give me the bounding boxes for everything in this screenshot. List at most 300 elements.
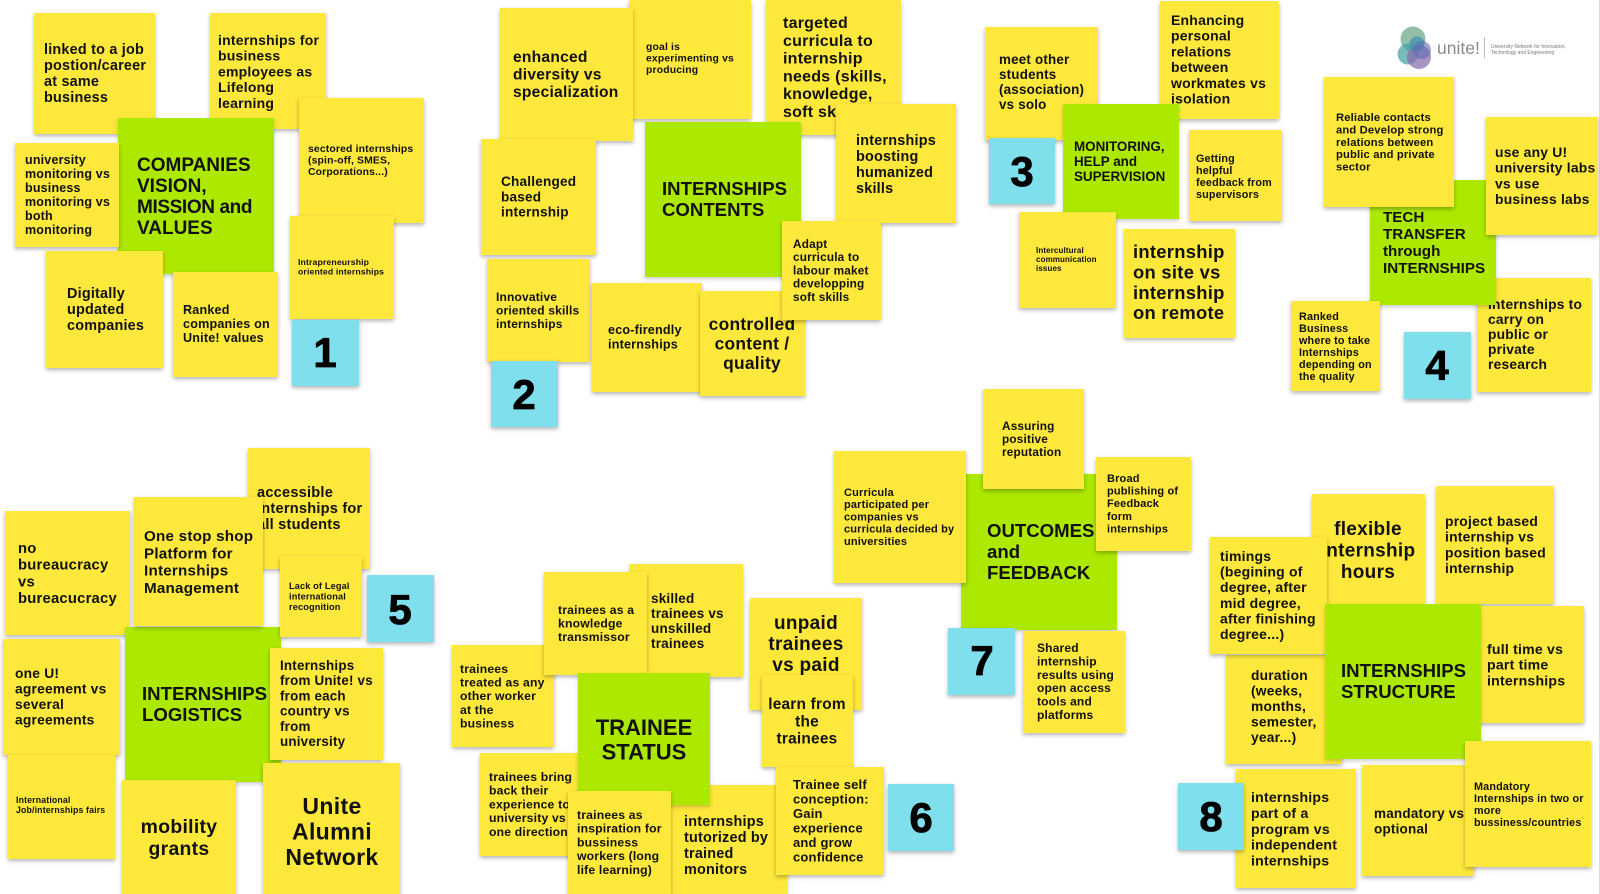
note: reliable contacts: and Develop strong xyxy=(1336,124,1443,136)
number badge 5: 5 xyxy=(388,586,412,633)
note: intercultural communication issues: issues xyxy=(1036,264,1062,273)
note: one stop shop platform: Internships xyxy=(144,563,228,580)
note: intrapreneurship oriented internships: Intrapreneurship xyxy=(298,257,369,267)
note: intercultural communication issues: Intercultural xyxy=(1036,246,1084,255)
note: trainees treated as any other worker: at the xyxy=(460,703,494,717)
note: assuring positive reputation: reputation xyxy=(1002,445,1061,459)
heading note: trainee status: TRAINEE xyxy=(596,715,692,740)
note: internships part of a program: independent xyxy=(1251,837,1337,853)
note: challenged based internship: internship xyxy=(501,205,569,220)
note: timings: degree, after xyxy=(1220,579,1307,595)
note: sectored internships xyxy=(299,98,424,223)
note: internships to carry on research: public or xyxy=(1488,327,1549,342)
note: shared internship results: results using xyxy=(1037,668,1114,682)
note: internships from unite: university xyxy=(280,734,346,749)
note: learn from the trainees: trainees xyxy=(777,731,837,748)
note: one U! agreement: one U! xyxy=(15,666,59,681)
note: challenged based internship: Challenged xyxy=(501,174,576,189)
note: enhanced diversity: diversity vs xyxy=(513,66,602,84)
number badge 8: 8 xyxy=(1199,793,1223,840)
note: international job fairs xyxy=(8,755,115,859)
logo tagline: University Network for Innovation, xyxy=(1491,44,1566,50)
note: lack of legal recognition: international xyxy=(289,592,346,602)
note: eco-firendly internships xyxy=(592,283,702,392)
heading note: companies vision, mission and values: COMPANIES xyxy=(137,155,251,176)
heading note: tech transfer through internships: through xyxy=(1383,243,1440,260)
note: one stop shop platform: One stop shop xyxy=(144,528,253,545)
note: ranked companies: companies on xyxy=(183,317,270,331)
note: enhancing personal relations: workmates vs xyxy=(1170,75,1266,91)
note: no bureaucracy: bureaucracy xyxy=(18,558,109,574)
note: timings xyxy=(1210,537,1327,654)
note: no bureaucracy xyxy=(5,511,130,635)
note: one stop shop platform: Platform for xyxy=(144,545,233,562)
note: university monitoring: both xyxy=(25,209,53,223)
note: enhanced diversity xyxy=(500,8,633,141)
note: internships part of a program xyxy=(1236,769,1356,888)
note: shared internship results: tools and xyxy=(1037,695,1092,709)
note: sectored internships: (spin-off, SMES, xyxy=(308,156,390,166)
note: use any U! university labs: business labs xyxy=(1495,191,1590,207)
note: eco-firendly internships: eco-firendly xyxy=(608,323,682,337)
heading note: tech transfer through internships: INTERNSHIPS xyxy=(1383,260,1485,277)
heading note: trainee status: STATUS xyxy=(602,740,686,764)
cluster 8: internships structure xyxy=(1178,486,1591,888)
note: internships boosting humanized skills: humanized xyxy=(856,165,933,181)
note: unite alumni network: Network xyxy=(285,844,379,870)
note: broad publishing of feedback: Feedback xyxy=(1107,498,1160,510)
heading note: internships structure: STRUCTURE xyxy=(1341,681,1456,702)
note: skilled trainees xyxy=(630,564,743,677)
heading note: companies vision, mission and values: MISSION and xyxy=(137,197,252,218)
note: targeted curricula: needs (skills, xyxy=(783,68,887,85)
note: internship on site vs remote: internship xyxy=(1133,282,1225,303)
note: adapt curricula: soft skills xyxy=(793,290,850,304)
note: accessible internships xyxy=(248,448,370,569)
note: internships from unite: country vs xyxy=(280,704,350,719)
note: trainees treated as any other worker: other worker xyxy=(460,689,536,703)
note: no bureaucracy: no xyxy=(18,541,37,557)
note: shared internship results: internship xyxy=(1037,654,1097,668)
note: internships for business employees: business xyxy=(218,48,280,64)
note: internships part of a program: part of a xyxy=(1251,805,1309,821)
note: broad publishing of feedback xyxy=(1096,457,1191,551)
note: shared internship results: Shared xyxy=(1037,641,1079,655)
note: ranked business: Business xyxy=(1299,323,1348,335)
note: mandatory vs optional xyxy=(1362,765,1474,876)
heading note: outcomes and feedback: FEEDBACK xyxy=(987,562,1091,583)
logo mark: overlapping circles xyxy=(1398,26,1431,69)
cluster 6: trainee status xyxy=(452,564,954,894)
note: intrapreneurship oriented internships: oriented internships xyxy=(298,266,384,276)
cluster 3: monitoring, help and supervision xyxy=(985,1,1282,338)
note: mandatory internships in two or more: bussiness/countries xyxy=(1474,817,1581,829)
note: internships for business employees: employees as xyxy=(218,63,312,79)
heading note: outcomes and feedback: and xyxy=(987,541,1020,562)
note: duration: (weeks, xyxy=(1251,684,1302,698)
note: meet other students: (association) xyxy=(999,82,1084,97)
note: project based internship: internship xyxy=(1445,560,1514,576)
note: sectored internships: Corporations...) xyxy=(308,167,388,178)
note: internships tutorized by trained monitors: monitors xyxy=(684,862,747,878)
cluster 1: companies vision, mission and values xyxy=(15,13,424,386)
note: university monitoring xyxy=(15,143,119,247)
note: internships from unite: from xyxy=(280,719,311,734)
note: adapt curricula: curricula to xyxy=(793,250,859,264)
note: ranked companies: Unite! values xyxy=(183,331,264,345)
note: one U! agreement: several xyxy=(15,697,64,712)
note: broad publishing of feedback: Broad xyxy=(1107,473,1140,485)
heading note: internships logistics xyxy=(125,627,281,782)
note: adapt curricula xyxy=(782,221,881,320)
note: internships to carry on research: research xyxy=(1488,357,1547,372)
note: sectored internships: sectored internships xyxy=(308,144,413,155)
note: duration: duration xyxy=(1251,668,1308,683)
note: internships tutorized by trained monitors xyxy=(668,785,787,894)
number badge 6: 6 xyxy=(909,794,933,841)
note: trainees bring back experience: experience to xyxy=(489,797,570,811)
note: trainees as inspiration xyxy=(568,791,671,894)
note: internship on site vs remote: internship xyxy=(1133,241,1225,262)
note: enhancing personal relations: isolation xyxy=(1171,90,1230,106)
note: flexible internship hours xyxy=(1312,494,1425,607)
note: flexible internship hours: hours xyxy=(1341,562,1395,583)
note: unite alumni network: Alumni xyxy=(292,818,372,844)
note: one U! agreement: agreement vs xyxy=(15,682,107,696)
note: trainees treated as any other worker: business xyxy=(460,716,514,730)
note: accessible internships: internships for xyxy=(257,501,363,517)
note: unpaid trainees vs paid: unpaid xyxy=(774,613,838,634)
note: linked to a job: business xyxy=(44,90,108,106)
note: ranked business: where to take xyxy=(1298,335,1370,347)
note: no bureaucracy: bureacucracy xyxy=(18,591,117,607)
number badge 1 xyxy=(292,320,359,386)
note: internship on site vs remote xyxy=(1124,229,1235,338)
number badge 3 xyxy=(989,138,1055,204)
note: full time vs part time xyxy=(1478,606,1584,723)
note: meet other students: vs solo xyxy=(999,97,1047,112)
note: flexible internship hours: flexible xyxy=(1334,519,1402,540)
cluster 5: internships logistics xyxy=(3,448,434,894)
note: duration: year...) xyxy=(1251,730,1296,745)
heading note: outcomes and feedback xyxy=(961,474,1117,630)
note: eco-firendly internships: internships xyxy=(608,338,678,352)
note: mobility grants: mobility xyxy=(141,816,217,838)
note: university monitoring: university xyxy=(25,153,86,167)
note: challenged based internship xyxy=(481,139,596,255)
cluster 2: internships contents xyxy=(481,0,956,427)
note: internships boosting humanized skills: boosting xyxy=(856,149,918,165)
logo tagline: Technology and Engineering xyxy=(1491,50,1554,56)
note: trainees as inspiration: life learning) xyxy=(577,863,652,877)
note: timings: mid degree, xyxy=(1220,595,1301,611)
note: trainees as a knowledge transmissor: trainees as a xyxy=(558,603,634,617)
note: ranked business: depending on xyxy=(1299,359,1372,371)
note: ranked business: Ranked xyxy=(1299,311,1339,323)
number badge 2: 2 xyxy=(512,371,536,418)
note: curricula participated: participated per xyxy=(844,499,930,511)
note: international job fairs: Job/internships fairs xyxy=(16,805,105,815)
note: mandatory internships in two or more: more xyxy=(1474,805,1501,817)
note: digitally updated companies: companies xyxy=(67,318,144,334)
note: trainees treated as any other worker: treated as any xyxy=(460,676,545,690)
note: lack of legal recognition: recognition xyxy=(289,602,341,612)
note: curricula participated xyxy=(834,451,966,583)
note: duration: semester, xyxy=(1251,714,1317,730)
heading note: internships logistics: LOGISTICS xyxy=(142,704,242,725)
note: assuring positive reputation: Assuring xyxy=(1002,419,1055,433)
note: digitally updated companies: updated xyxy=(67,302,124,318)
heading note: trainee status xyxy=(578,673,710,805)
logo: unite! xyxy=(1398,26,1566,69)
note: unpaid trainees vs paid xyxy=(750,598,862,710)
note: enhancing personal relations: between xyxy=(1171,59,1228,75)
note: internships boosting humanized skills: skills xyxy=(856,181,893,197)
note: meet other students: meet other xyxy=(999,52,1070,67)
note: trainee self conception: conception: xyxy=(793,792,869,806)
note: project based internship: position based xyxy=(1445,544,1546,560)
note: ranked companies xyxy=(173,272,278,377)
note: trainees bring back experience: back their xyxy=(489,784,548,798)
note: intercultural communication issues: communication xyxy=(1036,255,1097,264)
note: innovative oriented skills internships: internships xyxy=(496,317,563,331)
note: curricula participated: Curricula xyxy=(844,487,894,499)
note: trainees as inspiration: inspiration for xyxy=(577,822,662,836)
note: use any U! university labs xyxy=(1486,117,1598,235)
note: innovative oriented skills internships: Innovative xyxy=(496,290,557,304)
note: targeted curricula: curricula to xyxy=(783,33,873,50)
note: timings: after finishing xyxy=(1220,610,1316,626)
note: reliable contacts: Reliable contacts xyxy=(1336,112,1431,124)
note: internships part of a program: program vs xyxy=(1251,821,1330,837)
note: enhanced diversity: enhanced xyxy=(513,49,588,66)
note: internships to carry on research: carry on xyxy=(1488,312,1544,327)
note: ranked companies: Ranked xyxy=(183,303,230,317)
note: getting helpful feedback: feedback from xyxy=(1196,177,1272,189)
note: internships from unite xyxy=(270,648,383,760)
note: lack of legal recognition xyxy=(280,556,362,637)
number badge 7 xyxy=(948,628,1015,695)
note: trainees bring back experience: trainees bring xyxy=(489,770,572,784)
note: internships for business employees xyxy=(210,13,326,129)
note: targeted curricula: internship xyxy=(783,51,863,68)
note: curricula participated: curricula decided by xyxy=(844,524,955,536)
note: university monitoring: monitoring xyxy=(25,223,92,237)
note: broad publishing of feedback: form xyxy=(1107,511,1132,523)
note: internships from unite: from each xyxy=(280,688,346,703)
note: assuring positive reputation xyxy=(983,389,1084,489)
number badge 7: 7 xyxy=(970,637,994,684)
note: project based internship: project based xyxy=(1445,513,1538,529)
note: getting helpful feedback: supervisors xyxy=(1196,189,1259,201)
note: one U! agreement: agreements xyxy=(15,712,95,728)
note: trainees bring back experience xyxy=(480,753,590,856)
note: shared internship results: platforms xyxy=(1037,708,1093,722)
note: trainees as inspiration: trainees as xyxy=(577,808,643,822)
note: linked to a job xyxy=(34,13,155,134)
note: full time vs part time: internships xyxy=(1487,672,1565,688)
note: mobility grants xyxy=(122,780,236,894)
note: internships boosting humanized skills xyxy=(836,104,956,223)
heading note: tech transfer through internships: TRANSFER xyxy=(1383,226,1466,243)
note: internships from unite: Internships xyxy=(280,658,354,673)
note: internships tutorized by trained monitors: internships xyxy=(684,814,764,830)
note: shared internship results: open access xyxy=(1037,681,1111,695)
note: internships for business employees: learning xyxy=(218,95,274,111)
note: enhancing personal relations: Enhancing xyxy=(1171,12,1244,28)
note: duration: months, xyxy=(1251,699,1306,714)
note: unpaid trainees vs paid: trainees xyxy=(768,634,844,655)
note: getting helpful feedback: helpful xyxy=(1196,165,1233,177)
heading note: monitoring, help and supervision: SUPERVISION xyxy=(1074,169,1165,184)
number badge 1: 1 xyxy=(313,329,337,376)
note: skilled trainees: trainees xyxy=(651,636,704,651)
note: getting helpful feedback: Getting xyxy=(1196,153,1235,165)
heading note: outcomes and feedback: OUTCOMES xyxy=(987,520,1094,541)
note: challenged based internship: based xyxy=(501,189,541,204)
note: timings: timings xyxy=(1220,548,1271,564)
note: university monitoring: monitoring vs xyxy=(25,195,110,209)
note: internships from unite: from Unite! vs xyxy=(280,673,373,688)
note: use any U! university labs: university labs xyxy=(1495,160,1595,176)
note: university monitoring: business xyxy=(25,181,81,195)
number badge 3: 3 xyxy=(1010,148,1034,195)
note: lack of legal recognition: Lack of Legal xyxy=(289,581,350,591)
note: internships tutorized by trained monitors: trained xyxy=(684,846,734,862)
heading note: companies vision, mission and values: VISION, xyxy=(137,176,207,197)
note: internships for business employees: internships for xyxy=(218,32,319,48)
note: internships part of a program: internships xyxy=(1251,789,1329,805)
note: learn from the trainees xyxy=(762,675,853,767)
note: trainee self conception: Trainee self xyxy=(793,777,867,792)
note: trainees treated as any other worker: trainees xyxy=(460,662,508,676)
note: internships to carry on research: private xyxy=(1488,342,1535,357)
note: ranked business: the quality xyxy=(1299,371,1355,383)
note: enhanced diversity: specialization xyxy=(513,84,619,101)
note: internship on site vs remote: on site vs xyxy=(1133,261,1221,282)
number badge 2 xyxy=(491,361,558,427)
heading note: companies vision, mission and values: VALUES xyxy=(137,218,213,239)
number badge 8 xyxy=(1178,783,1244,850)
note: ranked business xyxy=(1291,301,1380,391)
note: unpaid trainees vs paid: vs paid xyxy=(772,655,840,676)
note: ranked business: Internships xyxy=(1299,347,1359,359)
note: getting helpful feedback xyxy=(1189,130,1282,221)
note: mandatory vs optional: mandatory vs xyxy=(1374,806,1464,821)
note: assuring positive reputation: positive xyxy=(1002,432,1048,446)
note: digitally updated companies xyxy=(46,251,163,368)
note: duration xyxy=(1226,655,1342,764)
note: one stop shop platform xyxy=(134,497,263,626)
note: curricula participated: universities xyxy=(844,536,907,548)
note: intercultural communication issues xyxy=(1019,212,1116,308)
heading note: internships contents xyxy=(645,122,801,277)
note: reliable contacts: relations between xyxy=(1336,137,1433,149)
note: adapt curricula: developping xyxy=(793,277,864,291)
note: internship on site vs remote: on remote xyxy=(1133,302,1224,323)
note: controlled content / quality xyxy=(700,291,805,396)
note: curricula participated: companies vs xyxy=(844,511,919,523)
note: trainees as inspiration: workers (long xyxy=(576,849,659,863)
note: flexible internship hours: internship xyxy=(1321,540,1415,562)
note: internships boosting humanized skills: internships xyxy=(856,133,936,149)
heading note: internships contents: INTERNSHIPS xyxy=(662,178,787,199)
heading note: tech transfer through internships: TECH xyxy=(1383,209,1424,226)
cluster 4: tech transfer through internships xyxy=(1291,77,1598,399)
note: internships for business employees: Lifelong xyxy=(218,79,274,95)
note: trainees treated as any other worker xyxy=(452,645,554,747)
note: timings: (begining of xyxy=(1220,564,1303,580)
logo wordmark: unite! xyxy=(1437,38,1480,58)
note: internships to carry on research: internships to xyxy=(1488,297,1582,312)
note: no bureaucracy: vs xyxy=(18,574,35,590)
number badge 6 xyxy=(888,784,954,851)
note: skilled trainees: skilled xyxy=(651,591,694,606)
note: skilled trainees: unskilled xyxy=(651,621,711,636)
note: accessible internships: all students xyxy=(257,517,341,533)
note: adapt curricula: Adapt xyxy=(793,237,827,251)
note: linked to a job: at same xyxy=(44,74,99,90)
note: reliable contacts xyxy=(1324,77,1454,207)
note: linked to a job: linked to a job xyxy=(44,42,144,58)
note: meet other students xyxy=(985,27,1098,140)
note: reliable contacts: sector xyxy=(1336,162,1371,174)
note: adapt curricula: labour maket xyxy=(793,263,869,277)
note: unite alumni network: Unite xyxy=(302,793,362,819)
note: controlled content / quality: content / xyxy=(715,334,789,354)
note: skilled trainees: trainees vs xyxy=(651,606,724,621)
note: full time vs part time: part time xyxy=(1487,657,1548,673)
note: project based internship: internship vs xyxy=(1445,529,1534,545)
note: reliable contacts: public and private xyxy=(1336,149,1435,161)
note: use any U! university labs: vs use xyxy=(1495,175,1540,191)
note: mandatory internships in two or more: Internships in two or xyxy=(1474,793,1584,805)
note: goal is experimenting: experimenting vs xyxy=(646,54,734,64)
number badge 4: 4 xyxy=(1425,342,1449,389)
note: targeted curricula xyxy=(766,0,901,135)
heading note: tech transfer through internships xyxy=(1370,180,1496,305)
note: enhancing personal relations xyxy=(1160,1,1279,119)
heading note: monitoring, help and supervision: HELP and xyxy=(1074,154,1137,169)
note: trainee self conception xyxy=(776,767,884,875)
note: innovative oriented skills internships xyxy=(487,259,590,362)
note: enhancing personal relations: personal xyxy=(1171,28,1231,44)
note: trainees bring back experience: one direction xyxy=(489,825,568,839)
note: innovative oriented skills internships: oriented skills xyxy=(496,303,580,317)
heading note: internships structure: INTERNSHIPS xyxy=(1341,660,1466,681)
note: broad publishing of feedback: publishing of xyxy=(1107,486,1178,498)
note: full time vs part time: full time vs xyxy=(1487,641,1563,657)
note: mandatory internships in two or more xyxy=(1465,741,1591,867)
heading note: monitoring, help and supervision xyxy=(1063,104,1179,219)
note: trainee self conception: confidence xyxy=(793,850,864,864)
note: international job fairs: International xyxy=(16,795,71,805)
note: digitally updated companies: Digitally xyxy=(67,286,125,302)
note: mobility grants: grants xyxy=(148,838,210,860)
note: accessible internships: accessible xyxy=(257,485,333,501)
note: meet other students: students xyxy=(999,67,1056,82)
note: shared internship results xyxy=(1023,631,1125,733)
note: controlled content / quality: quality xyxy=(723,353,781,373)
note: timings: degree...) xyxy=(1220,626,1284,642)
note: mandatory internships in two or more: Mandatory xyxy=(1474,781,1530,793)
note: goal is experimenting: producing xyxy=(646,65,698,76)
note: targeted curricula: targeted xyxy=(783,15,848,32)
note: linked to a job: postion/career xyxy=(44,58,146,74)
note: trainees bring back experience: university vs xyxy=(489,811,566,825)
note: trainee self conception: experience xyxy=(793,820,863,836)
heading note: monitoring, help and supervision: MONITORING, xyxy=(1074,139,1165,154)
